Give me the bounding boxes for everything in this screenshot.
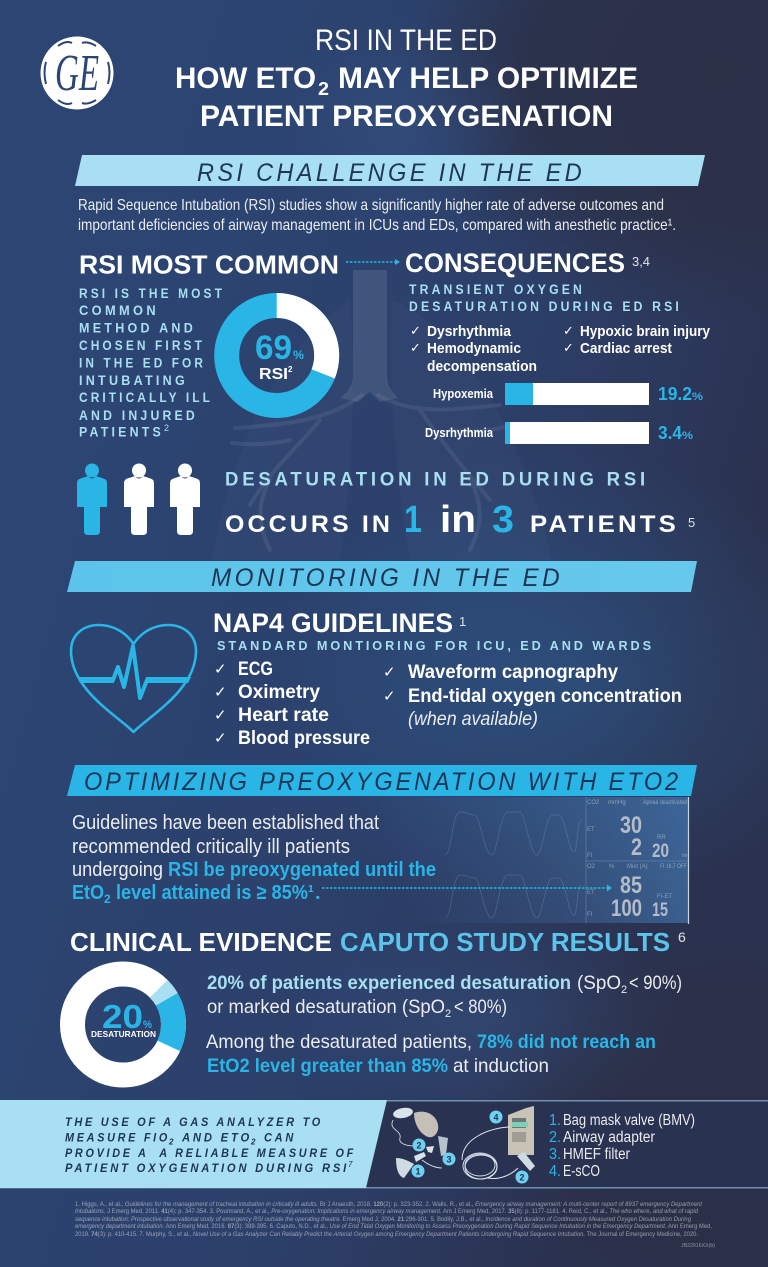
bar chart: hypoxemia and dysrhythmia: Dysrhythmia [425,426,494,440]
monitor screen: Apnea deactivated [643,800,687,806]
text: guidelines: EtO [72,881,104,904]
monitoring checklist: Heart rate [238,704,329,726]
icon: three people, one highlighted [77,464,200,535]
monitor screen: mmHg [608,800,626,806]
text: transient oxygen desaturation [409,282,682,314]
monitor screen: 15 [652,900,668,921]
monitor screen: RR [657,835,666,841]
references [75,1202,715,1249]
legend: equipment list: 3. [549,1146,561,1163]
text: gas analyzer statement: MEASURE FIO [65,1130,170,1144]
text: gas analyzer statement: 2 [250,1138,256,1146]
panel: gas analyzer strip [0,1100,768,1188]
monitor screen: 85 [620,872,642,899]
heading: RSI most common: RSI MOST COMMON [79,250,339,280]
consequences checklist: Dysrhythmia [427,323,512,340]
text: RSI is the most common: PATIENTS [79,424,164,440]
monitor screen: % [609,864,615,870]
illustration: bag mask and gas analyzer: 2 [520,1172,525,1182]
heading: NAP4 guidelines: 1 [459,614,466,629]
text: RSI is the most common: AND INJURED [79,408,198,423]
heading: clinical evidence: 6 [678,929,686,945]
illustration: bag mask and gas analyzer: 4 [494,1112,499,1122]
heading: clinical evidence [70,929,686,957]
references: sequence intubation: Prospective observational study of emergency RSI outside the operating theatre. Emerg Med J, 2004. 21:296-301. 5. Bodily, J.B., et al., Incidence and duration of Continuously Measured Oxygen Desaturation During [75,1217,692,1223]
legend: equipment list: Airway adapter [563,1129,655,1146]
consequences checklist: Hemodynamic [427,340,521,357]
donut chart: 69% RSI: 2 [288,365,293,374]
consequences checklist: decompensation [427,358,537,375]
text: gas analyzer statement: THE USE OF A GAS ANALYZER TO [65,1115,323,1129]
text: guidelines: level attained is ≥ 85%¹ [116,881,314,904]
monitoring checklist: (when available) [408,708,538,730]
monitor screen: 30 [620,812,642,839]
text: transient oxygen desaturation: DESATURATION DURING ED RSI [409,299,682,314]
consequences checklist: ✓ [563,324,574,339]
monitor screen: FI [587,912,593,918]
text: RSI is the most common: INTUBATING [79,373,188,388]
text: gas analyzer statement: CAN [264,1130,296,1144]
heading: clinical evidence: CLINICAL EVIDENCE [70,929,332,957]
title: RSI IN THE ED [315,24,497,57]
intro text [78,197,676,234]
text: transient oxygen desaturation: TRANSIENT OXYGEN [409,282,585,297]
arrow: to monitor value [322,884,612,892]
text: study findings: < 90%) [629,972,682,994]
monitoring checklist: ✓ [214,729,227,747]
GE logo: GE [55,45,99,102]
text: study findings: EtO2 level greater than 85% [207,1055,448,1077]
legend: equipment list: 1. [549,1112,561,1129]
illustration: bag mask and gas analyzer [392,1106,535,1184]
monitor screen: 20 [652,841,669,862]
monitoring checklist: ECG [238,658,273,680]
legend: equipment list: HMEF filter [563,1146,630,1163]
donut chart: 69% RSI: 69 [255,329,292,367]
monitoring checklist: ✓ [214,706,227,724]
title [175,24,638,133]
text: RSI is the most common: 2 [164,423,169,433]
bar chart: hypoxemia and dysrhythmia: 3.4 [658,423,682,443]
GE logo [40,36,114,110]
monitoring checklist: ✓ [383,663,396,681]
bar chart: hypoxemia and dysrhythmia: Hypoxemia [433,387,494,401]
banner: monitoring [67,561,697,592]
consequences checklist: ✓ [410,341,421,356]
heading: consequences: CONSEQUENCES [405,248,625,278]
references: 2019. 74(3): p. 410-415. 7. Murphy, S., et al., Novel Use of a Gas Analyzer Can Reliably Predict the Arterial Oxygen among Emergency Department Patients Undergoing Rapid Sequence Intubation. The Journal of Emergency Medicine, 2020. [75,1232,698,1238]
text: study findings: 2 [621,984,627,996]
donut chart: 20% desaturation: 20 [102,998,143,1035]
illustration: bag mask and gas analyzer: 1 [416,1166,421,1176]
monitoring checklist: ✓ [214,683,227,701]
bar chart: hypoxemia and dysrhythmia: % [682,430,693,442]
text: guidelines: RSI be preoxygenated until the [168,858,436,881]
banner: optimizing preoxygenation: OPTIMIZING PREOXYGENATION WITH ETO2 [84,768,681,796]
heading: NAP4 guidelines: STANDARD MONTIORING FOR ICU, ED AND WARDS [217,638,654,653]
legend: equipment list: 2. [549,1129,561,1146]
text: RSI is the most common: IN THE ED FOR [79,356,206,370]
illustration: bag mask and gas analyzer: 3 [446,1154,452,1164]
callout: desaturation 1 in 3: 1 [404,499,422,541]
monitor screen [380,797,688,924]
monitor screen: CO2 [587,800,600,806]
legend: equipment list: E-sCO [563,1163,600,1180]
title: PATIENT PREOXYGENATION [200,100,613,133]
monitoring checklist: Waveform capnography [408,661,618,683]
monitor screen: ET [587,827,595,833]
monitoring checklist: Blood pressure [238,727,370,749]
text: study findings: Among the desaturated patients, [206,1031,472,1053]
banner: RSI challenge [75,155,705,187]
donut chart: 20% desaturation: % [143,1019,152,1031]
text: gas analyzer statement: 2 [168,1138,174,1146]
donut chart: 20% desaturation: DESATURATION [91,1029,156,1039]
text: RSI is the most common: CHOSEN FIRST [79,338,205,353]
donut chart: 20% desaturation [52,953,194,1096]
references: Intubations. J Emerg Med, 2011. 41(4): p. 347-354. 3. Pourmand, A., et al., Pre-oxygenation: Implications in emergency airway management. Am J Emerg Med, 2017. 35(8): p. 1177-1181. 4. Reid, C., et al., The who where, and what of rapid [75,1209,699,1215]
intro text: Rapid Sequence Intubation (RSI) studies show a significantly higher rate of adverse outcomes and [78,197,664,214]
monitoring checklist [214,658,682,749]
text: study findings: at induction [453,1055,549,1077]
consequences checklist: ✓ [410,324,421,339]
monitor screen: 100 [611,895,642,922]
consequences checklist: Hypoxic brain injury [580,323,711,340]
heading: clinical evidence: CAPUTO STUDY RESULTS [340,929,670,957]
text: RSI is the most common: METHOD AND [79,320,196,336]
legend: equipment list: 4. [549,1163,561,1180]
text: guidelines: recommended critically ill patients [72,835,350,858]
monitoring checklist: ✓ [383,687,396,705]
monitor screen: ET [587,890,595,896]
banner: RSI challenge: RSI CHALLENGE IN THE ED [197,159,585,187]
title: MAY HELP OPTIMIZE [338,62,638,95]
banner: monitoring: MONITORING IN THE ED [211,564,563,592]
monitor screen: Mixt (A) [627,864,648,870]
monitoring checklist: End-tidal oxygen concentration [408,685,682,707]
monitor screen: /m [682,853,688,859]
text: guidelines: Guidelines have been established that [72,811,379,834]
title: HOW ETO [175,62,316,95]
callout: desaturation 1 in 3: 5 [688,515,695,530]
text: guidelines: 2 [104,892,111,906]
text: study findings: 78% did not reach an [477,1031,656,1053]
text: study findings: < 80%) [454,996,507,1018]
text: study findings: (SpO [577,972,621,994]
text: gas analyzer statement: PATIENT OXYGENATION DURING RSI [65,1161,349,1175]
decorative lungs [212,270,552,560]
monitor screen: FI-ET [657,894,672,900]
text: gas analyzer statement [65,1115,356,1175]
callout: desaturation 1 in 3: OCCURS IN [225,511,393,538]
legend: equipment list [549,1112,695,1180]
text: study findings: or marked desaturation (SpO [207,996,445,1018]
bar chart: hypoxemia and dysrhythmia: % [692,391,703,403]
callout: desaturation 1 in 3: in [440,499,476,541]
consequences checklist: Cardiac arrest [580,340,672,357]
text: RSI is the most common: RSI IS THE MOST [79,286,225,301]
callout: desaturation 1 in 3: 3 [492,499,514,541]
references: emergency department intubation. Ann Emerg Med, 2016. 67(3): 389-395. 6. Caputo, N.D., et al., Use of End Tidal Oxygen Monitoring to Assess Preoxygenation During Rapid Sequence Intubation in the Emergency Department. Ann Emerg Med, [75,1224,712,1230]
callout: desaturation 1 in 3 [225,468,695,541]
donut chart: 69% RSI: % [293,348,304,362]
text: RSI is the most common: COMMON [79,303,159,318]
text: RSI is the most common [79,286,225,440]
text: guidelines: . [315,882,321,904]
text: study findings: 2 [445,1008,451,1020]
text: guidelines: undergoing [72,858,163,881]
text: guidelines [72,811,436,906]
donut chart: 69% RSI: RSI [259,366,288,383]
bar chart: hypoxemia and dysrhythmia: 19.2 [658,384,692,404]
monitor screen: O2 [587,864,596,870]
monitoring checklist: Oximetry [238,681,320,703]
callout: desaturation 1 in 3: PATIENTS [530,511,679,538]
references: 1. Higgs, A., et al., Guidelines for the management of tracheal intubation in critically ill adults. Br J Anaesth, 2018. 120(2): p. 323-352. 2. Walls, R., et al., Emergency airway management: A multi-center report of 8937 emergency Department [75,1202,702,1208]
arrow: to consequences [346,259,400,265]
heading: NAP4 guidelines: NAP4 GUIDELINES [213,608,453,638]
donut chart: 69% RSI [227,306,327,406]
heading: consequences: 3,4 [632,254,650,269]
intro text: important deficiencies of airway management in ICUs and EDs, compared with anesthetic practice¹. [78,217,676,234]
references: JB22916XX(b) [681,1243,715,1249]
text: gas analyzer statement: 7 [348,1160,353,1169]
legend: equipment list: Bag mask valve (BMV) [563,1112,695,1129]
icon: heart with ECG [71,625,196,732]
text: gas analyzer statement: AND ETO [181,1130,252,1144]
text: gas analyzer statement: PROVIDE A A RELIABLE MEASURE OF [65,1146,356,1160]
monitor screen: FI [587,853,593,859]
text: study findings: 20% of patients experienced desaturation [207,972,571,994]
consequences checklist [410,323,711,375]
illustration: bag mask and gas analyzer: 2 [416,1140,422,1150]
title: 2 [318,79,329,99]
text: RSI is the most common: CRITICALLY ILL [79,390,213,405]
text: study findings [206,972,682,1077]
monitor screen: 2 [631,834,642,861]
monitor screen: FI 16.7 OFF [660,864,687,870]
heading: NAP4 guidelines [213,608,654,653]
monitoring checklist: ✓ [214,660,227,678]
callout: desaturation 1 in 3: DESATURATION IN ED DURING RSI [225,468,649,490]
consequences checklist: ✓ [563,341,574,356]
bar chart: hypoxemia and dysrhythmia [425,383,703,444]
